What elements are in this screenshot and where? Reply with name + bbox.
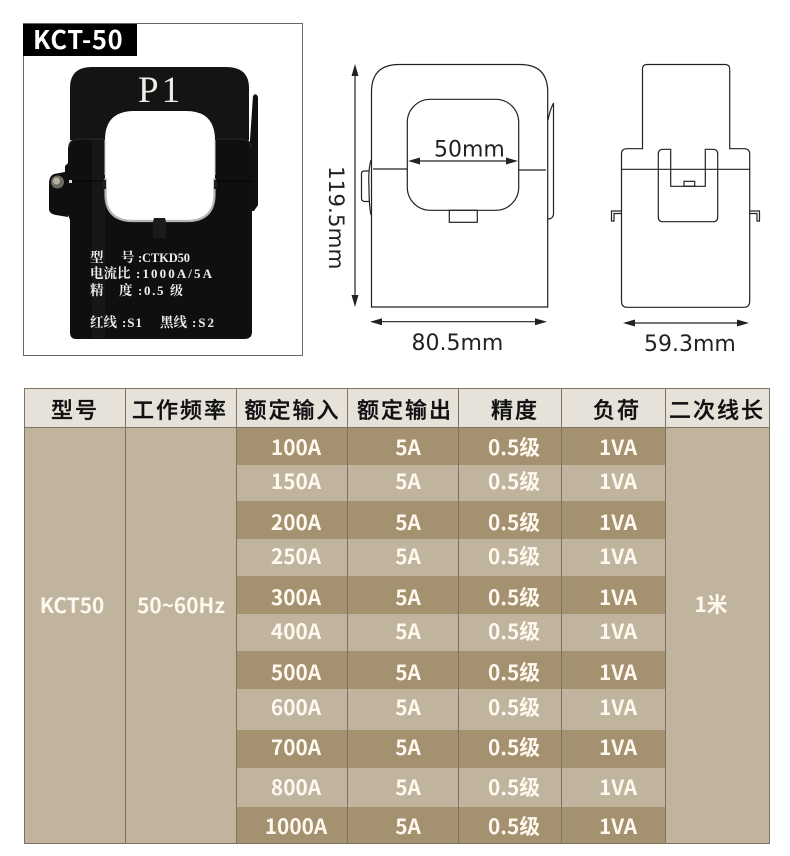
row 200A: 1VA [599,506,638,536]
nameplate text: 号 [121,250,135,265]
nameplate text: 电流比 [90,265,131,281]
row 600A: 5A [395,691,421,721]
row 100A: 0.5级 [488,431,540,461]
arrow: width 50mm [408,158,518,164]
label: P1: P1 [138,70,183,111]
right clip [750,211,760,221]
row 500A: 1VA [599,656,638,686]
table: specification [24,388,770,844]
row 800A [236,768,665,807]
row 1000A: 1VA [599,810,638,840]
nameplate text: 精 [90,282,104,298]
nameplate text [90,249,214,330]
window tab [449,210,477,222]
row 400A [236,614,665,651]
table header row: 工作频率 [132,398,228,423]
row 250A [236,539,665,576]
table header row: 额定输入 [244,398,341,423]
row 200A [236,501,665,539]
row 500A: 5A [395,656,421,686]
merged cell: frequency: 50~60Hz [137,589,225,619]
row 400A: 5A [395,615,421,645]
nameplate text: :S1 [122,315,142,330]
nameplate text: 型 [90,249,104,265]
row 700A: 5A [395,731,421,761]
row 150A [236,465,665,501]
row 700A [236,730,665,768]
row 150A: 0.5级 [488,465,540,495]
arrow: height [352,64,358,307]
window [407,99,519,210]
row 400A: 400A [271,615,322,645]
row 600A: 0.5级 [488,691,540,721]
table header row: 负荷 [593,398,641,423]
row 150A: 150A [271,465,322,495]
row 250A: 250A [271,540,322,570]
front outline [372,64,548,307]
window side profile [658,149,718,222]
row 400A: 0.5级 [488,615,540,645]
row 150A: 1VA [599,465,638,495]
row 200A: 200A [271,506,322,536]
row 500A [236,651,665,689]
row 250A: 5A [395,540,421,570]
transformer upper jaw [70,67,249,140]
row 1000A [236,807,665,843]
nameplate text: 红线 [90,314,117,330]
row 300A: 5A [395,581,421,611]
panel: product photo [24,24,302,356]
row 400A: 1VA [599,615,638,645]
row 800A: 0.5级 [488,771,540,801]
tab under window [153,218,166,238]
side outline [622,64,750,307]
row 200A: 5A [395,506,421,536]
row 800A: 5A [395,771,421,801]
table header row [24,388,769,428]
row 300A [236,576,665,614]
row 700A: 700A [271,731,322,761]
left clip [612,211,621,221]
row 500A: 0.5级 [488,656,540,686]
row 600A [236,689,665,730]
left clip [362,160,371,215]
label: 59.3mm: 59.3mm [644,332,736,357]
nameplate text: 黑线 [160,314,187,330]
label: 50mm: 50mm [434,138,505,162]
merged column backgrounds [24,428,236,843]
window opening [105,111,215,222]
row 600A: 1VA [599,691,638,721]
row 800A: 1VA [599,771,638,801]
row 700A: 1VA [599,731,638,761]
merged cell: model: KCT50 [40,589,104,619]
row 1000A: 5A [395,810,421,840]
table header row: 二次线长 [669,398,765,423]
row 600A: 600A [271,691,322,721]
row 150A: 5A [395,465,421,495]
right clip [548,103,554,219]
row 200A: 0.5级 [488,506,540,536]
row 1000A: 0.5级 [488,810,540,840]
table header row: 额定输出 [357,398,453,423]
row 100A [236,428,665,465]
diagram: side view [612,64,760,357]
heading: KCT-50: KCT-50 [33,20,123,57]
row 100A: 5A [395,431,421,461]
row 800A: 800A [271,771,322,801]
nameplate text: :1000A/5A [136,266,213,281]
nameplate text: 度 [119,282,133,298]
merged cell: lead length: 1米 [694,588,728,618]
label: 80.5mm: 80.5mm [412,331,503,356]
row 250A: 0.5级 [488,540,540,570]
label: 119.5mm: 119.5mm [323,166,348,269]
transformer lower body [68,138,252,339]
row 300A: 300A [271,581,322,611]
icon: right side clip [250,94,258,211]
row 700A: 0.5级 [488,731,540,761]
row 300A: 0.5级 [488,581,540,611]
arrow: width [370,318,547,325]
table header row: 精度 [491,398,539,423]
row 300A: 1VA [599,581,638,611]
row 100A: 1VA [599,431,638,461]
row 1000A: 1000A [265,810,328,840]
row 500A: 500A [271,656,322,686]
diagram: front view [323,64,554,356]
nameplate text: :0.5 级 [138,283,183,298]
row 250A: 1VA [599,540,638,570]
arrow: depth [623,320,749,326]
row 100A: 100A [271,431,322,461]
small latch [684,181,695,186]
nameplate text: :CTKD50 [138,251,190,265]
table header row: 型号 [51,398,99,423]
icon: left side clip with screw [49,163,68,217]
nameplate text: :S2 [192,315,214,330]
